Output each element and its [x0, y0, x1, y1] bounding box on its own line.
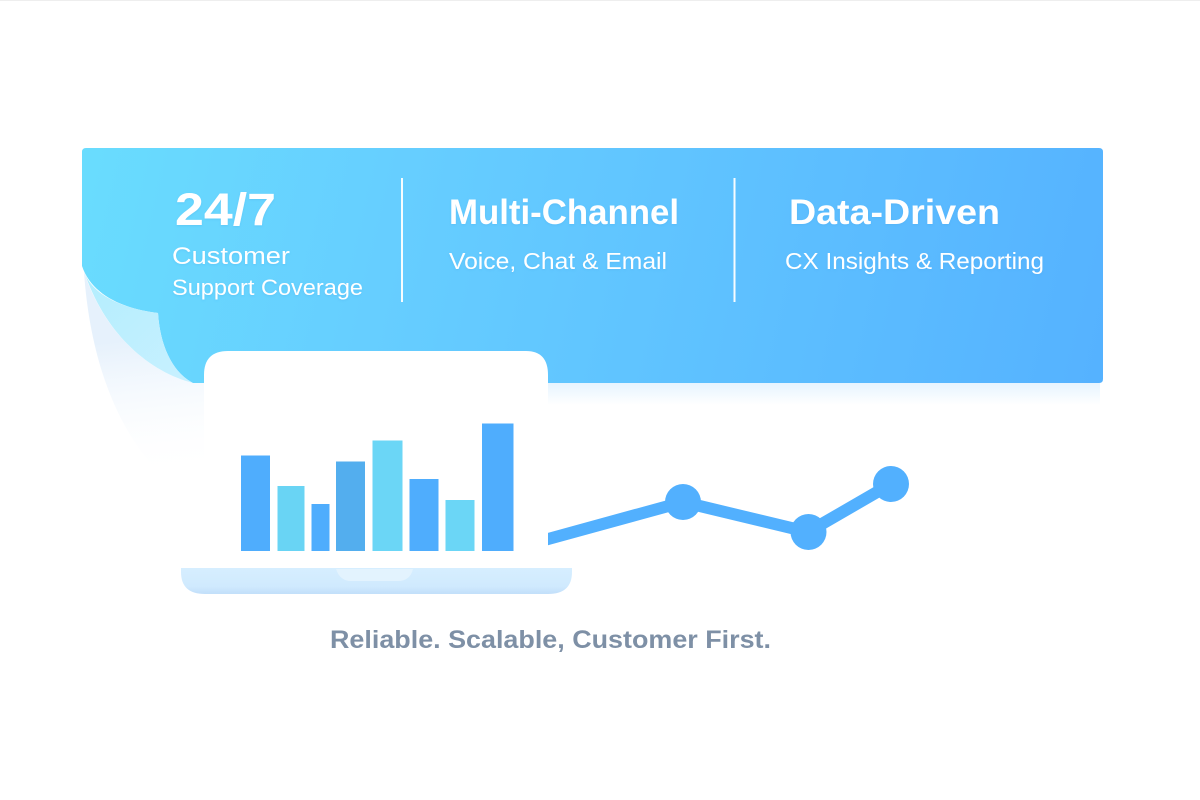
tagline: Reliable. Scalable, Customer First. — [330, 626, 771, 654]
divider 2 — [734, 178, 736, 302]
laptop base — [181, 568, 572, 594]
stat: 24/7 coverage — [172, 184, 363, 300]
stat: multi-channel — [449, 193, 679, 274]
stat: data-driven: CX Insights & Reporting — [785, 248, 1044, 274]
page curl shadow — [84, 272, 204, 480]
laptop screen — [204, 351, 548, 569]
divider 1 — [401, 178, 403, 302]
banner shadow — [548, 383, 1100, 405]
banner curled flap — [84, 271, 193, 383]
bar chart — [241, 424, 514, 551]
stat: 24/7 coverage: 24/7 — [175, 184, 276, 235]
panel: banner — [82, 148, 1103, 383]
trend line chart — [530, 466, 909, 550]
stat: 24/7 coverage: Support Coverage — [172, 275, 363, 300]
top edge line — [0, 0, 1200, 1]
stat: multi-channel: Voice, Chat & Email — [449, 248, 667, 274]
laptop notch — [336, 569, 413, 581]
stat: data-driven: Data-Driven — [789, 193, 1000, 232]
laptop illustration — [181, 351, 572, 594]
stat: multi-channel: Multi-Channel — [449, 193, 679, 232]
stat: data-driven — [785, 193, 1044, 274]
stat: 24/7 coverage: Customer — [172, 243, 290, 270]
